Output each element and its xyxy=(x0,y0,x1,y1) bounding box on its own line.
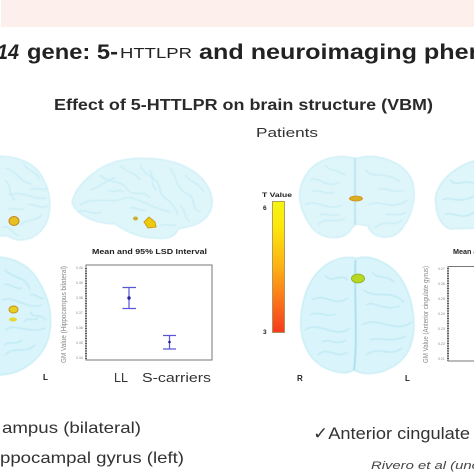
brain: left top view xyxy=(0,257,51,382)
chart: left GM value error bars: 0.39 xyxy=(76,281,83,285)
chart: right GM value xyxy=(423,266,474,363)
chart axis labels: LL xyxy=(114,370,128,385)
chart: right GM value: 0.25 xyxy=(438,297,445,301)
chart: left GM value error bars: 0.36 xyxy=(76,326,83,330)
title: and neuroimaging phen xyxy=(199,41,474,64)
chart: right GM value: 0.27 xyxy=(438,267,445,271)
chart: left GM value error bars xyxy=(61,265,212,363)
citation: Rivero et al (unc xyxy=(371,460,474,472)
title: gene: 5- xyxy=(27,41,118,64)
chart: left GM value error bars: 0.35 xyxy=(76,341,83,345)
T value colorbar xyxy=(262,192,292,336)
chart: right GM value: 0.24 xyxy=(438,312,445,316)
chart title: left: Mean and 95% LSD Interval xyxy=(92,247,207,256)
brain: left front view xyxy=(0,156,50,240)
finding: hippocampus: ampus (bilateral) xyxy=(2,420,141,437)
brain: right lateral view xyxy=(435,160,474,229)
chart: left GM value error bars: 0.37 xyxy=(76,311,83,315)
activation spots xyxy=(133,216,138,220)
chart: right GM value: GM Value (Anterior cingulate gyrus) xyxy=(423,266,430,363)
T value colorbar: 6 xyxy=(263,205,267,212)
finding: anterior cingulate: ✓Anterior cingulate xyxy=(313,424,470,443)
brain: left top view: L xyxy=(43,373,48,382)
title: HTTLPR xyxy=(120,45,192,62)
chart: left GM value error bars: 0.34 xyxy=(76,356,83,360)
chart: right GM value: 0.21 xyxy=(438,357,445,361)
T value colorbar: 3 xyxy=(263,329,267,336)
brain: right top view xyxy=(297,257,414,383)
patients label: Patients xyxy=(256,126,318,140)
subtitle: Effect of 5-HTTLPR on brain structure (VBM) xyxy=(54,97,433,114)
chart axis labels xyxy=(114,370,212,385)
T value colorbar: T Value xyxy=(262,192,292,199)
chart axis labels: S-carriers xyxy=(142,370,212,385)
error bar S-carriers xyxy=(163,336,176,349)
brain: right top view: R xyxy=(297,374,303,383)
chart: left GM value error bars: GM Value (Hippocampus bilateral) xyxy=(61,266,68,363)
chart: right GM value: 0.23 xyxy=(438,327,445,331)
title xyxy=(0,41,474,64)
top pink banner xyxy=(1,0,474,27)
brain: left lateral view xyxy=(72,158,212,239)
chart: right GM value: 0.26 xyxy=(438,282,445,286)
chart: left GM value error bars: 0.40 xyxy=(76,266,83,270)
chart: right GM value: 0.22 xyxy=(438,342,445,346)
finding: parahippocampal gyrus: ppocampal gyrus (left) xyxy=(0,450,184,467)
chart: left GM value error bars: 0.38 xyxy=(76,296,83,300)
brain: right front view xyxy=(300,156,414,238)
brain: right top view: L xyxy=(405,374,410,383)
error bar LL xyxy=(122,288,136,308)
